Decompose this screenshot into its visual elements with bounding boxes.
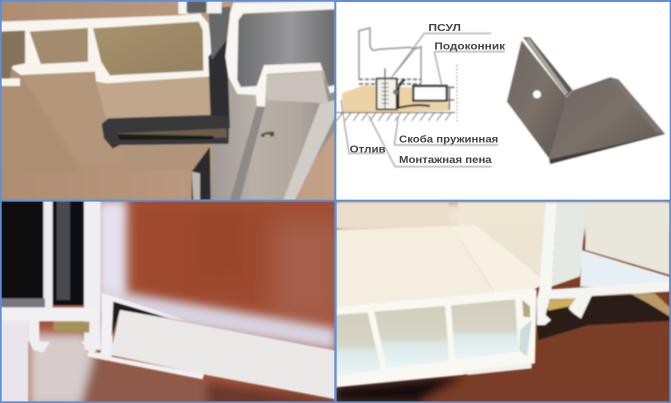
dark metal bracket bbox=[102, 115, 229, 149]
dark gap bbox=[208, 37, 230, 128]
frame bottom bbox=[0, 307, 100, 321]
lower left face of the sill bbox=[0, 83, 80, 173]
middle face of the sill bbox=[20, 72, 128, 164]
bottom clip bbox=[462, 363, 532, 375]
hollow cells bbox=[335, 313, 381, 377]
sill front edge bbox=[335, 288, 537, 387]
wooden table bbox=[335, 200, 671, 403]
right face of the sill bbox=[96, 77, 209, 120]
window frame outline bbox=[359, 28, 421, 83]
window frame dark chambers bbox=[0, 200, 45, 300]
label: Скоба пружинная: Скоба пружинная bbox=[399, 134, 499, 146]
panel: diagram of sill mounting with metal bracket bbox=[335, 0, 671, 203]
sill clip and body bbox=[87, 293, 204, 379]
label: ПСУЛ: ПСУЛ bbox=[428, 23, 461, 34]
profile chambers bbox=[93, 22, 203, 75]
panel: photo of sill section with spring clip on wooden table bbox=[335, 200, 671, 403]
screw bbox=[53, 322, 89, 333]
grey interior of profile bbox=[237, 9, 335, 87]
label: Отлив: Отлив bbox=[350, 144, 386, 155]
spring bracket bbox=[377, 79, 397, 109]
sill section bbox=[413, 86, 447, 101]
panel: photo of sill clipped under frame, side view bbox=[0, 200, 347, 403]
screw on rail bbox=[261, 132, 274, 137]
frame bbox=[537, 203, 557, 325]
panel: photo of sill profile with spring bracket bbox=[0, 0, 336, 203]
diagram drawing bbox=[335, 28, 505, 167]
white profile section bbox=[0, 13, 213, 83]
icon: metal spring bracket bbox=[507, 37, 665, 164]
screw bbox=[522, 300, 530, 317]
label: Подоконник: Подоконник bbox=[434, 41, 505, 52]
leader lines bbox=[341, 33, 505, 167]
white outer profile bbox=[225, 1, 335, 107]
dark shadow under frame bbox=[535, 295, 671, 340]
blurred red background bbox=[133, 200, 347, 320]
label: Монтажная пена: Монтажная пена bbox=[399, 155, 492, 166]
right profile rails bbox=[210, 80, 336, 200]
dotted vertical line bbox=[455, 65, 458, 123]
mounting foam bbox=[342, 85, 450, 113]
hatched wall bbox=[336, 112, 457, 121]
sill top surface bbox=[335, 226, 495, 308]
